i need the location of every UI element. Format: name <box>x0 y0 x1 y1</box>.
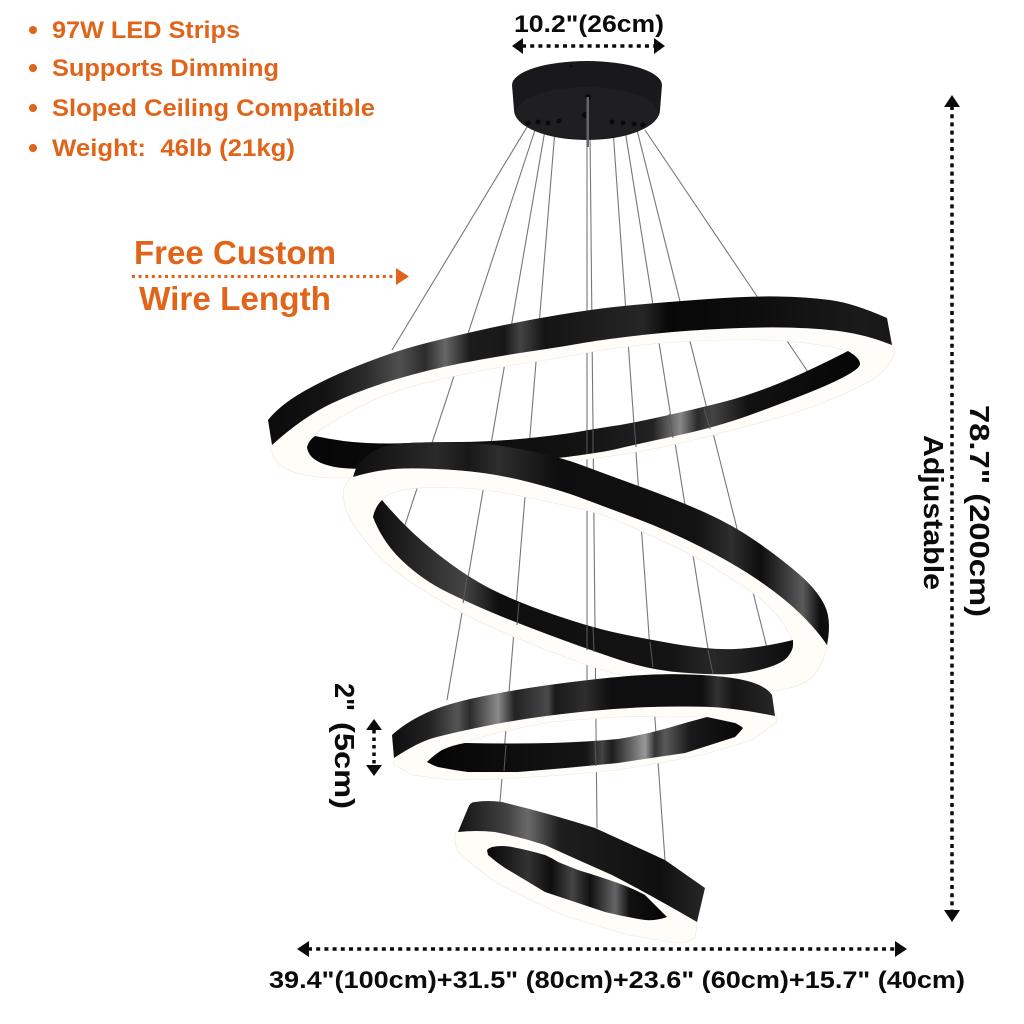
dimension: ring diameters: 39.4"(100cm)+31.5" (80cm)+23.6" (60cm)+15.7" (40cm) <box>269 967 965 994</box>
dimension: overall height: Adjustable <box>918 435 949 590</box>
dimension: overall height <box>918 95 995 922</box>
dimension: ring height: 2" <box>329 683 360 711</box>
dimension: ring height <box>329 683 382 809</box>
free custom wire length callout: Wire Length <box>139 280 331 317</box>
bullet: dimming: Supports Dimming <box>52 55 279 82</box>
feature list <box>29 17 375 162</box>
free custom wire length callout <box>132 234 409 317</box>
dimension: canopy diameter <box>512 11 665 54</box>
dimension: overall height: 78.7" (200cm) <box>964 405 995 617</box>
ring 4: 40cm <box>455 801 705 943</box>
chandelier illustration <box>268 61 895 943</box>
suspension wires <box>392 100 808 860</box>
ring 3: 60cm <box>392 674 777 780</box>
free custom wire length callout: Free Custom <box>134 234 336 271</box>
dimension: canopy diameter: 10.2"(26cm) <box>514 11 664 38</box>
bullet: weight: Weight: 46lb (21kg) <box>52 135 295 162</box>
dimension: ring diameters <box>269 941 965 994</box>
wires seen over the inner ring walls <box>463 408 713 771</box>
ring 2: 80cm <box>343 442 829 692</box>
dimension: ring height: (5cm) <box>329 722 360 809</box>
bullet: LED strips: 97W LED Strips <box>52 17 240 44</box>
ceiling canopy <box>512 61 662 147</box>
bullet: sloped ceiling: Sloped Ceiling Compatible <box>52 95 375 122</box>
ring 1: 100cm <box>268 296 895 478</box>
